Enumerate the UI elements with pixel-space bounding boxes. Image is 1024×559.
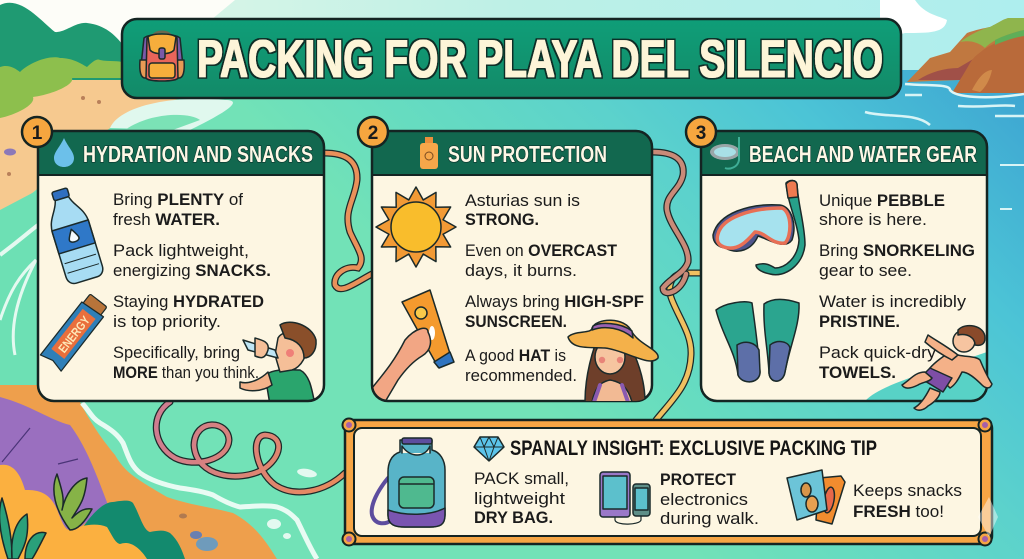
illustration: boy drinking water [240,322,316,405]
text: gear tips: PRISTINE. [819,312,900,331]
text: hydration tips: Bring PLENTY of [113,190,243,209]
text: hydration tips: is top priority. [113,312,221,331]
text: gear tips: Bring SNORKELING [819,241,975,260]
icon: energy bar: ENERGY [56,313,93,356]
badge: number 1: 1 [32,123,43,144]
icon: snorkel mask [713,180,805,275]
text: hydration tips: Staying HYDRATED [113,292,264,311]
text: gear tips [819,191,975,382]
text: electronics tip: PROTECT [660,470,737,489]
illustration: woman in sun hat [568,320,658,402]
frame [342,418,992,546]
text: sun protection tips: Always bring HIGH-SPF [465,292,644,311]
text: sun protection tips: Asturias sun is [465,191,580,210]
text: electronics tip: during walk. [660,509,759,528]
text: sun protection tips: STRONG. [465,210,539,229]
headland: top-right cliff [907,18,1024,93]
text: sun protection tips: Even on OVERCAST [465,241,618,260]
text: hydration tips: energizing SNACKS. [113,261,271,280]
text: snacks tip: Keeps snacks [853,481,962,500]
text: snacks tip [853,481,962,521]
text: electronics tip: electronics [660,490,748,509]
panel 2 header [372,131,652,175]
text: dry bag tip [474,469,569,527]
text: hydration tips: Specifically, bring [113,343,240,362]
badge: number 3: 3 [696,123,706,144]
text: gear tips: Pack quick-dry [819,343,937,362]
text: sun protection tips [465,191,644,385]
icon: energy bar [40,293,110,371]
watermark sparkle [978,497,998,537]
water patch [865,352,987,401]
text: gear tips: TOWELS. [819,363,896,382]
insight box [342,418,992,546]
illustration: boy swimming [902,326,992,410]
text: hydration tips: MORE than you think. [113,363,259,382]
connector rope: panel 2 to loop [652,152,688,293]
text: gear tips: Unique PEBBLE [819,191,945,210]
text: electronics tip [660,470,759,528]
badge: number 3 [686,117,716,147]
text: gear tips: shore is here. [819,210,927,229]
text: sun protection tips: days, it burns. [465,261,577,280]
text: hydration tips: Pack lightweight, [113,241,249,260]
icon: tablet and phone [600,472,650,524]
text: dry bag tip: PACK small, [474,469,569,488]
sand: lower-left [0,385,277,559]
panel 1 header [38,131,324,175]
text: sun protection tips: SUNSCREEN. [465,312,567,331]
icon: small mask [710,137,740,169]
panel 3 header [701,131,987,175]
text: dry bag tip: DRY BAG. [474,508,553,527]
text: hydration tips [113,190,271,382]
icon: backpack [140,32,184,81]
text: dry bag tip: lightweight [474,489,565,508]
icon: dry bag [372,438,445,527]
badge: number 2: 2 [368,123,378,144]
connector rope: panel 1 to panel 2 [324,153,372,289]
icon: water bottle [41,184,105,286]
panel 1 header: HYDRATION AND SNACKS [83,141,313,167]
connector rope: panel 1 to insight box [156,402,345,492]
icon: swim fins [716,299,799,382]
insight heading: SPANALY INSIGHT: EXCLUSIVE PACKING TIP [510,436,877,460]
text: snacks tip: FRESH too! [853,502,944,521]
badge: number 2 [358,117,388,147]
panel 2 header: SUN PROTECTION [448,141,607,167]
title banner [122,19,901,98]
badge: number 1 [22,117,52,147]
connector rope: panel 3 to insight box [656,273,701,420]
panel 3: beach and water gear [701,131,992,410]
icon: diamond [474,437,504,461]
text: sun protection tips: A good HAT is [465,346,566,365]
text: hydration tips: fresh WATER. [113,210,220,229]
icon: snack packets [787,470,845,524]
text: gear tips: gear to see. [819,261,912,280]
text: gear tips: Water is incredibly [819,292,967,311]
icon: sunscreen tube and hand [372,290,454,402]
icon: sunscreen bottle [420,137,438,169]
icon: sun [376,187,456,267]
icon: water drop [54,138,74,167]
panel 1: hydration and snacks [38,131,324,405]
text: sun protection tips: recommended. [465,366,577,385]
panel 2: sun protection [372,131,658,402]
